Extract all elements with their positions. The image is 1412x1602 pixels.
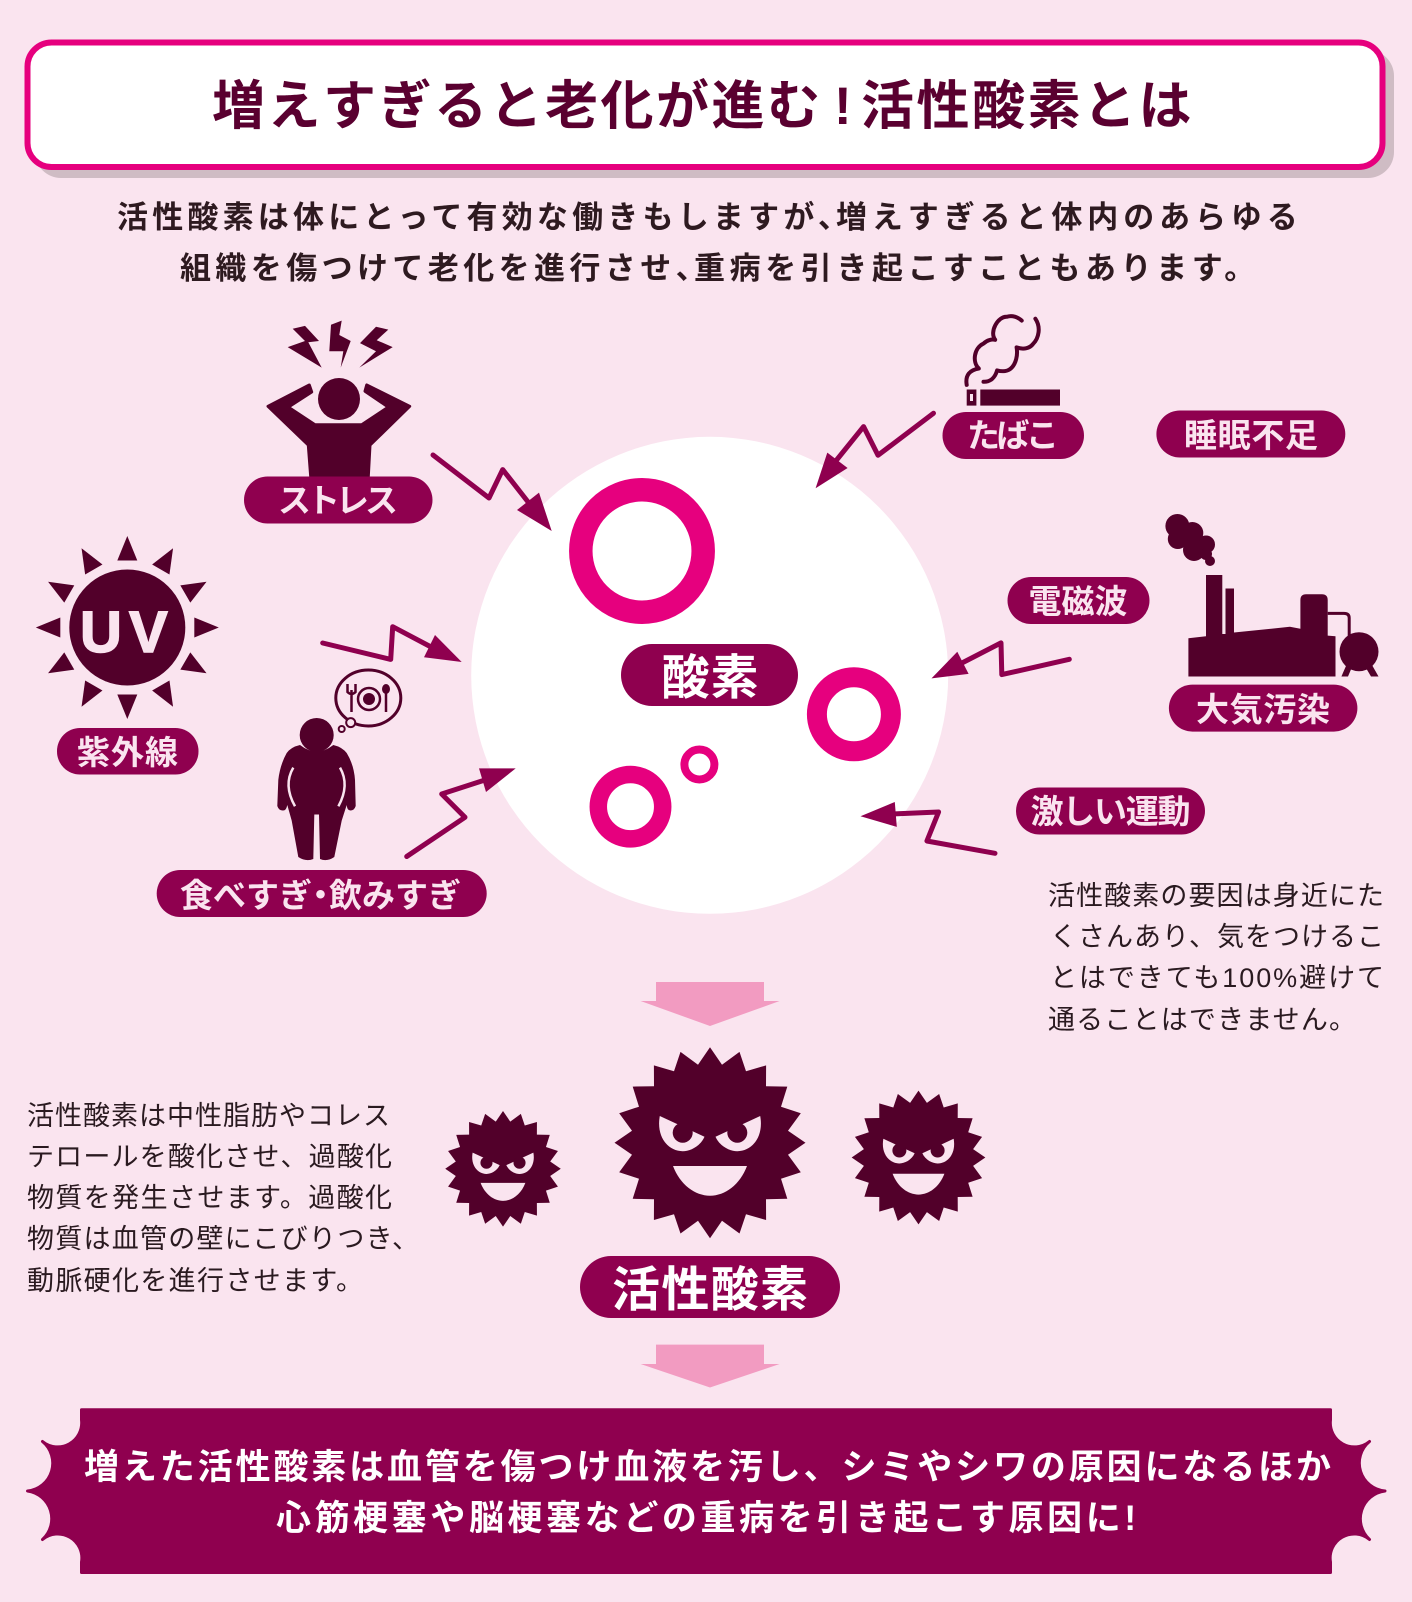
label: intense exercise [1016, 788, 1205, 834]
label: overeating: 食べすぎ [180, 877, 312, 914]
icon: stress person [268, 321, 410, 476]
title text: 増えすぎると老化が進む [212, 77, 822, 136]
label: active oxygen [580, 1256, 840, 1318]
arrow: stress [433, 455, 552, 531]
label: ultraviolet: 紫外線 [77, 734, 178, 771]
label: ultraviolet [57, 728, 198, 774]
label: air pollution: 大気汚染 [1196, 691, 1330, 728]
icon: virus center [614, 1047, 806, 1238]
label: tobacco: たばこ [967, 417, 1059, 454]
icon: UV sun: V [129, 600, 168, 665]
right explanation text: とはできても100%避けて [1050, 963, 1384, 993]
label: air pollution [1169, 685, 1357, 732]
icon: virus left [445, 1111, 561, 1227]
left explanation text: 物質を発生させます。過酸化 [27, 1183, 392, 1213]
intro text: 組織を傷つけて老化を進行させ、 [180, 251, 711, 286]
label: electromagnetic waves [1008, 577, 1150, 624]
left explanation text: テロールを酸化させ、過酸化 [27, 1142, 392, 1172]
left explanation text: 動脈硬化を進行させます。 [27, 1266, 363, 1296]
label: overeating [157, 870, 487, 917]
left explanation text: 物質は血管の壁にこびりつき、 [27, 1224, 419, 1254]
left explanation text [27, 1101, 419, 1296]
banner text [84, 1448, 1331, 1538]
icon: virus right [852, 1091, 985, 1224]
right explanation text [1048, 881, 1384, 1035]
label: stress: ストレス [278, 482, 398, 519]
bottom banner [28, 1410, 1385, 1572]
title box [28, 42, 1394, 178]
intro text: 重病を引き起こすこともあります。 [694, 251, 1260, 286]
label: lack of sleep: 睡眠不足 [1184, 417, 1318, 454]
right explanation text: 通ることはできません。 [1048, 1005, 1356, 1035]
intro text [117, 200, 1303, 286]
left explanation text: 活性酸素は中性脂肪やコレス [27, 1101, 390, 1131]
right explanation text: 活性酸素の要因は身近にた [1048, 881, 1384, 911]
label: electromagnetic waves: 電磁波 [1028, 583, 1128, 620]
banner text: 心筋梗塞や脳梗塞などの重病を引き起こす原因に! [276, 1499, 1136, 1538]
icon: UV sun [36, 536, 219, 719]
arrow: electromagnetic [932, 643, 1069, 678]
right explanation text: くさんあり、気をつけるこ [1050, 922, 1384, 952]
oxygen ring small [598, 774, 663, 839]
title text: ! [834, 77, 854, 136]
label: lack of sleep [1156, 410, 1345, 458]
oxygen ring tiny [684, 750, 714, 780]
oxygen ring medium [817, 677, 891, 751]
icon: cigarette [966, 316, 1060, 406]
oxygen ring large [581, 490, 703, 612]
label: tobacco [942, 412, 1084, 459]
white oxygen circle [471, 437, 948, 914]
label: overeating: ・ [304, 877, 337, 914]
label: overeating: 飲みすぎ [329, 877, 461, 914]
icon: UV sun: U [80, 600, 122, 665]
icon: overeating person [277, 670, 401, 860]
oxygen label pill [621, 644, 798, 706]
title text: 活性酸素とは [861, 77, 1194, 136]
arrow: exercise [860, 802, 995, 853]
banner text: 増えた活性酸素は血管を傷つけ血液を汚し、シミやシワの原因になるほか [84, 1448, 1331, 1487]
label: stress [244, 476, 432, 524]
arrow: overeating upper [323, 627, 462, 662]
icon: factory [1165, 514, 1378, 676]
label: intense exercise: 激しい運動 [1030, 793, 1190, 830]
label: active oxygen: 活性酸素 [612, 1264, 808, 1317]
intro text: 活性酸素は体にとって有効な働きもしますが、 [117, 200, 853, 235]
intro text: 増えすぎると体内のあらゆる [836, 200, 1303, 235]
arrow: overeating lower [407, 768, 516, 856]
down arrow bottom [641, 1345, 780, 1388]
arrow: tobacco [816, 413, 934, 488]
oxygen label pill: 酸素 [662, 652, 758, 705]
down arrow top [641, 982, 780, 1026]
